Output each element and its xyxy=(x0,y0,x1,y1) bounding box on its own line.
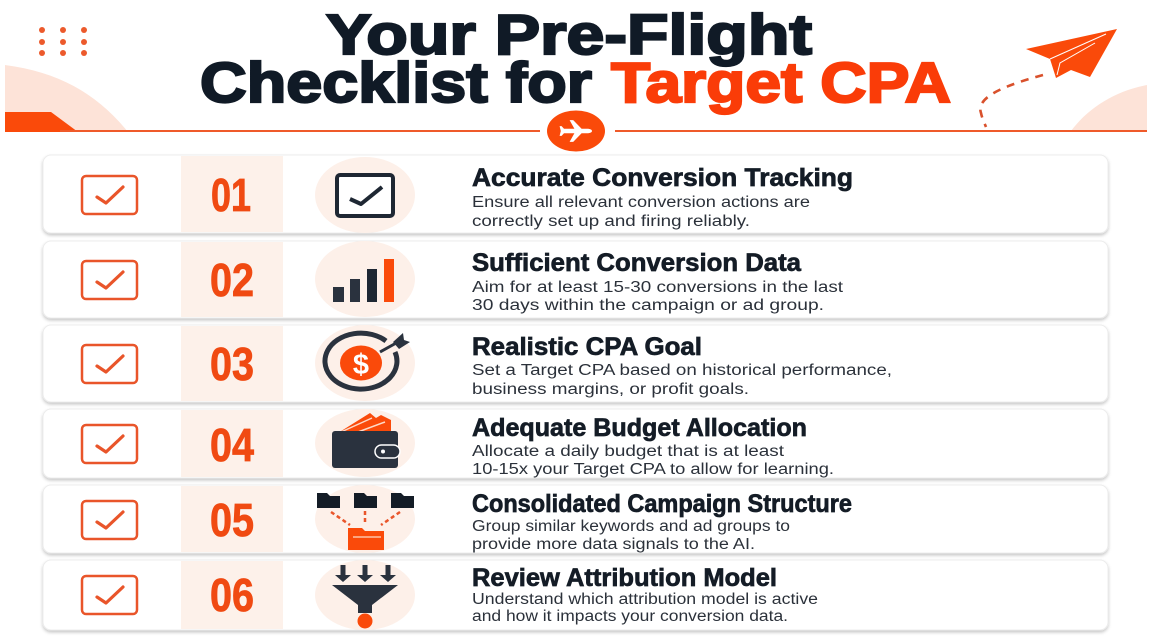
icon: folders merging xyxy=(315,485,415,553)
text 01: correctly set up and firing reliably. xyxy=(472,213,750,230)
text 06 xyxy=(472,564,818,625)
decoration: left header shapes xyxy=(5,65,128,132)
text 05: Group similar keywords and ad groups to xyxy=(472,518,790,535)
text 04: Allocate a daily budget that is at least xyxy=(472,443,785,460)
text 06: Understand which attribution model is active xyxy=(472,591,818,608)
panel: item 02 xyxy=(43,241,1108,318)
text 05 xyxy=(472,490,852,553)
icon: wallet with cash xyxy=(315,409,415,477)
icon: target with dollar: $ xyxy=(353,349,369,381)
text 01: Ensure all relevant conversion actions are xyxy=(472,194,810,211)
number cell 04: 04 xyxy=(210,419,254,471)
text 02 xyxy=(472,249,844,314)
number cell 06: 06 xyxy=(210,569,254,621)
icon: paper airplane with dashed trail xyxy=(980,29,1117,127)
number cell 01 xyxy=(181,156,283,232)
panel: item 05 xyxy=(43,485,1108,553)
checkbox 01 xyxy=(82,176,137,214)
text 03: business margins, or profit goals. xyxy=(472,381,749,398)
number cell 06 xyxy=(181,561,283,629)
number cell 03 xyxy=(181,326,283,401)
title xyxy=(200,3,951,115)
checkbox 04 xyxy=(82,425,137,463)
panel: item 04 xyxy=(43,409,1108,478)
panel: item 03 xyxy=(43,325,1108,402)
title: Your Pre-Flight xyxy=(326,3,812,67)
text 03: Realistic CPA Goal xyxy=(472,333,702,361)
panel: item 01 xyxy=(43,155,1108,233)
checkbox 03 xyxy=(82,345,137,383)
decoration: right header shape xyxy=(1071,85,1147,131)
text 04: Adequate Budget Allocation xyxy=(472,414,807,442)
text 03 xyxy=(472,333,892,398)
checkbox 06 xyxy=(82,576,137,614)
number cell 02: 02 xyxy=(210,254,254,306)
title: Checklist for xyxy=(200,51,592,115)
text 02: 30 days within the campaign or ad group. xyxy=(472,297,824,314)
text 01 xyxy=(472,164,853,230)
text 03: Set a Target CPA based on historical performance, xyxy=(472,362,892,379)
text 04 xyxy=(472,414,834,478)
text 02: Sufficient Conversion Data xyxy=(472,249,802,277)
number cell 01: 01 xyxy=(211,169,251,221)
title: Target CPA xyxy=(611,51,951,115)
number cell 02 xyxy=(181,242,283,317)
number cell 05: 05 xyxy=(210,494,254,546)
icon: funnel xyxy=(315,560,415,630)
icon: target with dollar xyxy=(315,325,415,401)
number cell 03: 03 xyxy=(210,338,254,390)
checkbox 05 xyxy=(82,501,137,539)
checkbox 02 xyxy=(82,261,137,299)
icon: bar chart xyxy=(315,241,415,317)
number cell 05 xyxy=(181,486,283,552)
text 04: 10-15x your Target CPA to allow for learning. xyxy=(472,461,834,478)
number cell 04 xyxy=(181,410,283,477)
text 01: Accurate Conversion Tracking xyxy=(472,164,853,192)
text 05: Consolidated Campaign Structure xyxy=(472,490,852,518)
icon: airplane badge xyxy=(547,110,605,152)
text 05: provide more data signals to the AI. xyxy=(472,536,755,553)
text 06: Review Attribution Model xyxy=(472,564,777,592)
decoration: dot grid xyxy=(39,27,87,56)
header rule xyxy=(60,130,1147,132)
icon: checkbox xyxy=(315,157,415,233)
text 06: and how it impacts your conversion data. xyxy=(472,608,788,625)
text 02: Aim for at least 15-30 conversions in the last xyxy=(472,279,844,296)
panel: item 06 xyxy=(43,560,1108,630)
